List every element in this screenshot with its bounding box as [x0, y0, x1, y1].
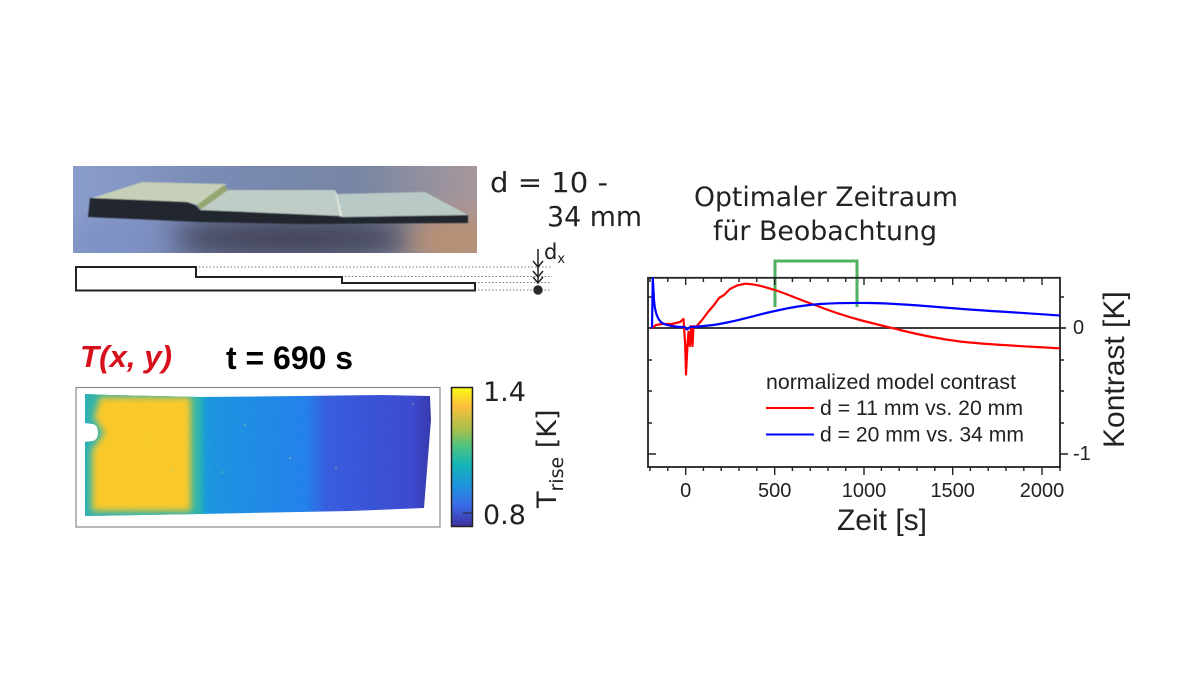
heading: optimal period — [694, 182, 958, 247]
colour bar labels: 0.8 — [483, 500, 526, 531]
x axis tick labels: 1500 — [930, 480, 975, 502]
y axis title: Kontrast [K] — [1098, 291, 1131, 448]
axis label: Trise: T — [532, 492, 563, 508]
label: time: t = 690 s — [226, 340, 353, 376]
legend — [766, 370, 1024, 446]
schematic: plate cross-section with depth lines — [76, 240, 565, 295]
x axis tick labels: 2000 — [1020, 480, 1064, 502]
x axis tick labels: 0 — [680, 480, 691, 502]
x axis title: Zeit [s] — [837, 504, 927, 537]
y axis tick labels: 0 — [1073, 317, 1084, 339]
curve: d = 20 mm vs. 34 mm — [652, 278, 1060, 330]
heading: optimal period: für Beobachtung — [713, 216, 937, 247]
legend: normalized model contrast — [766, 370, 1016, 394]
label: thickness range: d = 10 - — [490, 166, 608, 199]
axis label: Trise: [K] — [532, 409, 563, 457]
label: dx: d — [544, 240, 557, 264]
colour bar — [452, 377, 526, 531]
legend line: red — [766, 407, 814, 409]
bracket: optimal window — [775, 261, 857, 307]
x axis tick labels: 500 — [758, 480, 791, 502]
label: T(x, y): T(x, y) — [80, 339, 172, 374]
label: dx: x — [557, 252, 565, 267]
legend: d = 20 mm vs. 34 mm — [820, 422, 1024, 446]
icon: measuring point — [533, 285, 543, 295]
photo: stepped specimen plate — [73, 166, 477, 253]
curve: d = 11 mm vs. 20 mm — [652, 284, 1060, 374]
label: thickness range: 34 mm — [547, 200, 642, 233]
icon: depth arrows — [533, 249, 543, 283]
legend line: blue — [766, 434, 814, 436]
axis label: Trise: rise — [546, 457, 568, 492]
colour bar labels — [483, 377, 526, 531]
heading: optimal period: Optimaler Zeitraum — [694, 182, 958, 213]
heat map: temperature rise — [76, 388, 440, 527]
legend: d = 11 mm vs. 20 mm — [820, 396, 1023, 420]
line chart: contrast over time — [648, 278, 1068, 475]
label: thickness range — [490, 166, 642, 233]
y axis tick labels: -1 — [1073, 443, 1091, 465]
colour bar labels: 1.4 — [483, 377, 526, 408]
x axis tick labels: 1000 — [842, 480, 886, 502]
y axis tick labels — [1073, 317, 1091, 465]
x axis tick labels — [680, 480, 1064, 502]
